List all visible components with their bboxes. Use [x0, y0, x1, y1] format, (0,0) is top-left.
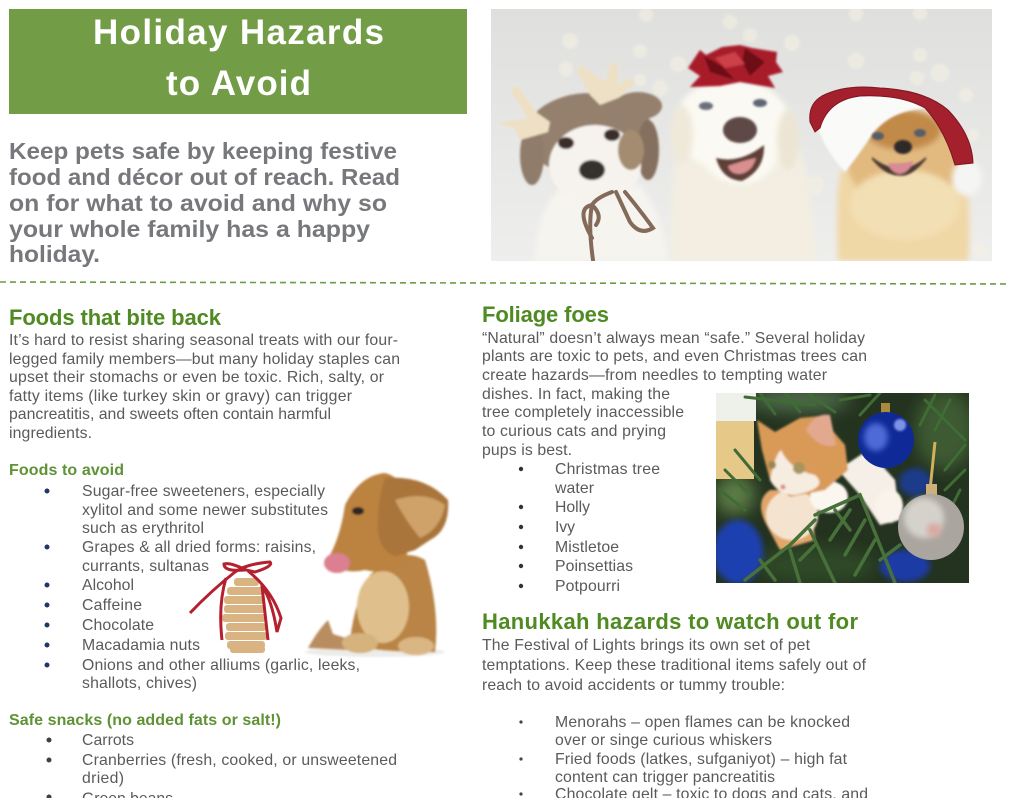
intro text: Keep pets safe by keeping festive: [9, 138, 397, 164]
paragraph: foliage intro: tree completely inaccessible: [482, 404, 684, 421]
list: foods to avoid: Alcohol: [82, 577, 134, 594]
intro text: food and décor out of reach. Read: [9, 164, 400, 190]
dog 3: [837, 108, 969, 261]
list: foods to avoid: Macadamia nuts: [82, 637, 200, 654]
paragraph: foods intro: legged family members—but many holiday staples can: [9, 351, 400, 368]
list: safe snacks: Cranberries (fresh, cooked, or unsweetened: [82, 752, 397, 769]
title banner: to Avoid: [166, 64, 311, 103]
dog 2 bow: [688, 45, 783, 88]
paragraph: foliage intro: pups is best.: [482, 442, 572, 459]
list: toxic plants: Potpourri: [555, 578, 620, 595]
kitten: [757, 415, 903, 550]
intro text: on for what to avoid and why so: [9, 190, 387, 216]
list: foods to avoid: such as erythritol: [82, 520, 204, 537]
fir branches: [720, 393, 965, 510]
list: toxic plants: Holly: [555, 499, 590, 516]
list: foods to avoid: shallots, chives): [82, 675, 197, 692]
paragraph: foods intro: pancreatitis, and sweets often contain harmful: [9, 406, 331, 423]
list: safe snacks: Carrots: [82, 732, 134, 749]
paragraph: foods intro: upset their stomachs or even be toxic. Rich, salty, or: [9, 369, 384, 386]
paragraph: foods intro: [9, 332, 400, 442]
section: foods that bite back: [9, 305, 400, 479]
list: toxic plants: [519, 461, 660, 595]
subheading: safe snacks: Safe snacks (no added fats or salt!): [9, 712, 281, 729]
list: foods to avoid: Chocolate: [82, 617, 154, 634]
paragraph: foliage intro: plants are toxic to pets, and even Christmas trees can: [482, 348, 867, 365]
heading: foods that bite back: Foods that bite back: [9, 305, 222, 330]
section: foliage foes: [482, 302, 867, 595]
paragraph: foods intro: It’s hard to resist sharing seasonal treats with our four-: [9, 332, 398, 349]
paragraph: foliage intro: create hazards—from needles to tempting water: [482, 367, 827, 384]
paragraph: hanukkah intro: The Festival of Lights brings its own set of pet: [482, 637, 811, 654]
list: foods to avoid: Grapes & all dried forms: raisins,: [82, 539, 316, 556]
list: hanukkah items: Menorahs – open flames can be knocked: [555, 714, 850, 731]
list: hanukkah items: over or singe curious whiskers: [555, 732, 772, 749]
list: hanukkah items: Fried foods (latkes, sufganiyot) – high fat: [555, 751, 848, 768]
dashed divider: [0, 282, 1010, 284]
paragraph: foliage intro: to curious cats and prying: [482, 423, 666, 440]
list: toxic plants: Ivy: [555, 519, 575, 536]
dog 2 body and head: [671, 79, 816, 261]
front branches: [745, 495, 900, 583]
list: toxic plants: Mistletoe: [555, 539, 619, 556]
santa hat: [810, 87, 982, 196]
dachshund: [305, 473, 448, 657]
paragraph: foods intro: ingredients.: [9, 425, 92, 442]
list: toxic plants: water: [554, 480, 594, 497]
dog 1 body: [540, 186, 663, 256]
list: toxic plants: Poinsettias: [555, 558, 633, 575]
list: foods to avoid: Sugar-free sweeteners, especially: [82, 483, 325, 500]
list: hanukkah items: content can trigger pancreatitis: [555, 769, 775, 786]
intro text: your whole family has a happy: [9, 216, 370, 242]
paragraph: foliage intro: [482, 330, 867, 459]
list: foods to avoid: xylitol and some newer substitutes: [82, 502, 328, 519]
list: hanukkah items: [519, 714, 868, 798]
list: safe snacks: dried): [82, 770, 124, 787]
dog 1 knitted ties: [584, 192, 653, 260]
silver ornament: [898, 442, 964, 560]
list: toxic plants: Christmas tree: [555, 461, 660, 478]
title banner: [9, 9, 467, 114]
cookie stack with ribbon: [190, 562, 281, 653]
list: foods to avoid: currants, sultanas: [82, 558, 209, 575]
photo: dachshund licking lips with cookie stack: [190, 473, 448, 657]
title banner: Holiday Hazards: [93, 13, 384, 52]
subheading: foods to avoid: Foods to avoid: [9, 462, 124, 479]
paragraph: hanukkah intro: reach to avoid accidents or tummy trouble:: [482, 677, 785, 694]
list: foods to avoid: Caffeine: [82, 597, 142, 614]
intro text: holiday.: [9, 241, 100, 267]
list: foods to avoid: Onions and other alliums (garlic, leeks,: [82, 657, 360, 674]
heading: foliage foes: Foliage foes: [482, 302, 609, 327]
section: hanukkah hazards: [482, 609, 868, 798]
photo: kitten in christmas tree: [713, 388, 975, 584]
paragraph: hanukkah intro: [482, 637, 867, 694]
paragraph: foliage intro: dishes. In fact, making the: [482, 386, 670, 403]
dog 2 face: [699, 99, 767, 181]
blue ornament: [858, 403, 914, 468]
list: safe snacks: [46, 732, 397, 798]
paragraph: hanukkah intro: temptations. Keep these traditional items safely out of: [482, 657, 867, 674]
intro text: [9, 138, 400, 267]
paragraph: foods intro: fatty items (like turkey skin or gravy) can trigger: [9, 388, 352, 405]
dog 1 head and reindeer hat: [498, 62, 664, 188]
dog 3 face: [872, 129, 926, 175]
paragraph: foliage intro: “Natural” doesn’t always mean “safe.” Several holiday: [482, 330, 865, 347]
heading: hanukkah hazards: Hanukkah hazards to watch out for: [482, 609, 858, 634]
list: foods to avoid: [44, 483, 360, 692]
photo: three dogs in holiday costumes: [491, 6, 992, 261]
